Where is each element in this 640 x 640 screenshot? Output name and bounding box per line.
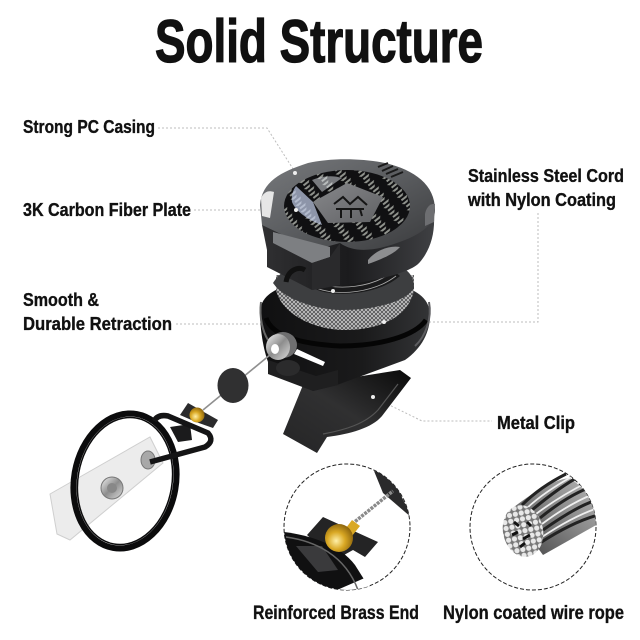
label: metal clip: Metal Clip	[497, 413, 575, 433]
upper spool with wound cord	[273, 266, 414, 310]
hexagon logo badge	[313, 183, 383, 223]
badge strap	[50, 437, 163, 540]
title: Solid Structure	[155, 8, 483, 75]
leader line: strong PC casing	[158, 128, 295, 172]
rope cross-section	[498, 501, 548, 561]
rubber washer	[218, 368, 248, 403]
leader line: retraction	[176, 291, 333, 324]
detail circle: brass end	[284, 464, 412, 592]
brass end and bracket	[170, 403, 218, 442]
retractor lower housing	[260, 286, 430, 391]
label: stainless steel cord: with Nylon Coating	[467, 190, 616, 210]
triangular link	[150, 416, 211, 462]
steel wire	[203, 345, 282, 410]
top cap	[260, 159, 435, 290]
cord eyelet	[266, 332, 297, 360]
leader line: metal clip	[373, 397, 492, 421]
grip ridges on cap	[378, 163, 403, 177]
leader line: stainless steel cord	[384, 213, 538, 322]
caption: reinforced brass end: Reinforced Brass End	[253, 603, 419, 624]
metal clip	[283, 370, 411, 453]
carbon fiber plate	[284, 170, 410, 242]
label: stainless steel cord	[467, 166, 624, 210]
knurled cord band	[276, 275, 414, 330]
key ring	[63, 405, 187, 557]
label: smooth and durable retraction: Durable Retraction	[23, 314, 172, 334]
leader line: carbon fiber plate	[194, 209, 296, 211]
label: smooth and durable retraction: Smooth &	[23, 290, 99, 310]
eyelet	[141, 451, 155, 469]
label: strong PC casing: Strong PC Casing	[23, 117, 155, 137]
snap button	[101, 477, 123, 499]
brass ball	[325, 520, 360, 552]
callout dots	[293, 171, 386, 399]
label: smooth and durable retraction	[23, 290, 172, 334]
label: carbon fiber plate: 3K Carbon Fiber Plate	[23, 200, 191, 220]
detail circle: wire rope	[470, 464, 598, 590]
label: stainless steel cord: Stainless Steel Cord	[468, 166, 624, 186]
